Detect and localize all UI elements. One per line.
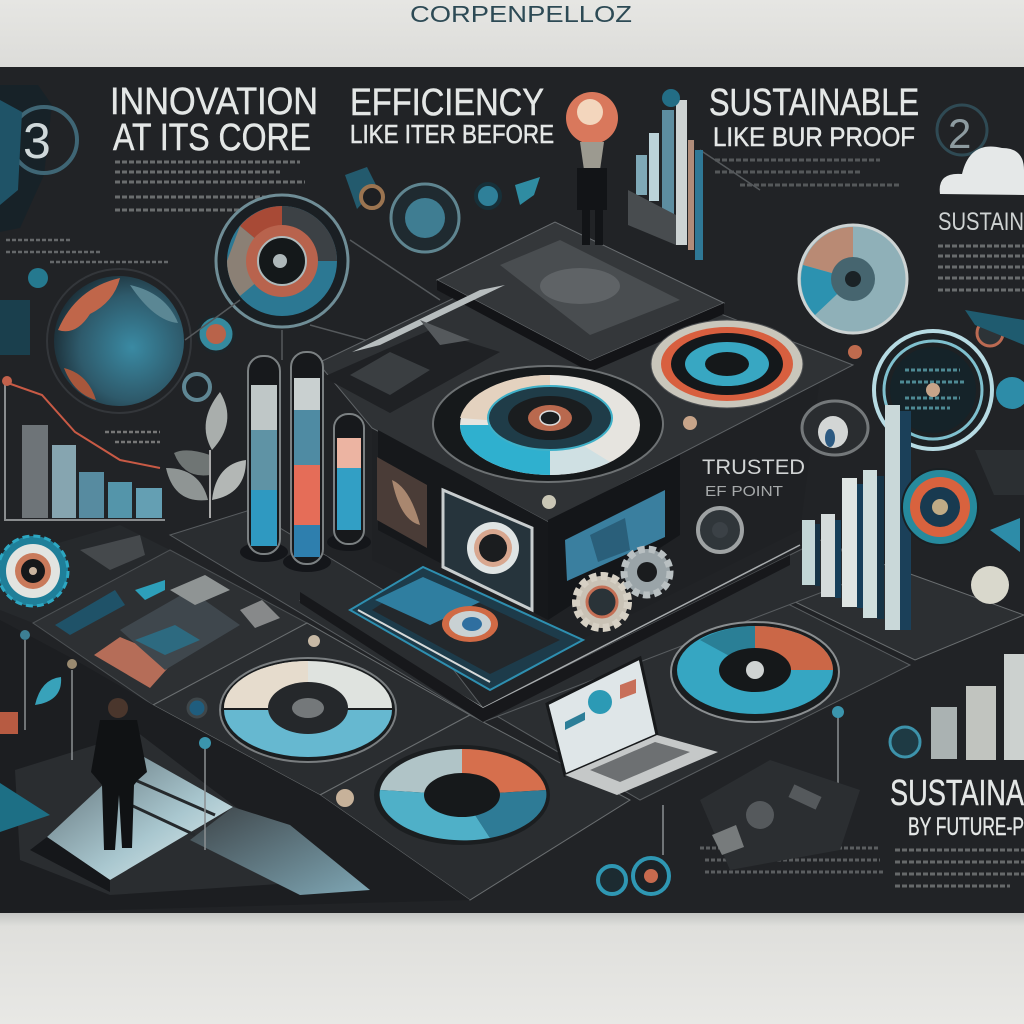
- text block: bottom center caption: [700, 848, 885, 872]
- icon: small bell dial: [802, 401, 868, 455]
- heading: efficiency: EFFICIENCY: [350, 82, 544, 124]
- icon: number 2 and cloud: [937, 105, 1024, 195]
- icon: lightbulb person: [566, 92, 618, 245]
- text block: sustainable caption top right: [715, 160, 900, 185]
- heading: innovation: [110, 81, 318, 159]
- chart: gauge left edge: [0, 536, 68, 606]
- icon: laptop: [547, 658, 718, 795]
- chart: right dial top: [799, 225, 907, 333]
- connector lines: [185, 150, 760, 360]
- heading: sustainable: SUSTAINABLE: [709, 82, 919, 124]
- panel: window left side of box: [443, 490, 532, 610]
- panel: box left side: [377, 430, 548, 620]
- text block: chart note: [105, 432, 160, 442]
- heading: innovation: AT ITS CORE: [113, 117, 311, 159]
- icon: leaf teal: [0, 630, 844, 749]
- chart: bars top middle: [628, 89, 703, 260]
- chart: upper right dial: [651, 320, 803, 408]
- label: trusted: EF POINT: [705, 483, 783, 500]
- icon: number 2 and cloud: 2: [948, 110, 971, 157]
- chart: bottom left dial: [220, 658, 396, 762]
- text block: sustain caption: [938, 246, 1024, 290]
- panel: left tile contents: [55, 535, 280, 688]
- wall background bottom: [0, 913, 1024, 1024]
- chart: right ring gauge: [874, 331, 1024, 449]
- chart: globe: [47, 269, 191, 413]
- platform lower tiles: [0, 525, 1024, 913]
- brand title: CORPENPELLOZ: [410, 1, 632, 27]
- chart: dial top left: [216, 195, 348, 327]
- heading: sustainable by future: [890, 772, 1024, 841]
- text block: small caption left: [6, 240, 170, 262]
- heading: sustainable: LIKE BUR PROOF: [713, 122, 915, 152]
- chart: test tubes: [240, 352, 371, 572]
- chart: line and bar chart left: [2, 376, 165, 520]
- panel: tablet: [350, 567, 583, 690]
- chart: orange eye dial: [902, 469, 1009, 604]
- main box base: [170, 378, 880, 722]
- text block: innovation caption: [115, 162, 305, 210]
- left markers: [25, 640, 838, 855]
- icons: bottom pair: [598, 858, 669, 894]
- label: trusted: TRUSTED: [702, 456, 805, 479]
- right misc icons: [683, 310, 1024, 552]
- icon: gears: [576, 508, 742, 628]
- panel: top plate: [437, 222, 724, 372]
- icon: small studs: [188, 635, 354, 807]
- small cluster icons top middle: [345, 167, 540, 252]
- label: trusted: [702, 456, 805, 500]
- icon: airplane on plate: [352, 285, 505, 352]
- bottom left platform with person: [0, 732, 370, 895]
- icon: number 3 badge: 3: [23, 113, 51, 169]
- heading: efficiency: [350, 82, 554, 149]
- wall background top: [0, 0, 1024, 67]
- icon: small target left: [0, 268, 234, 400]
- panel: box top surface: [318, 250, 853, 522]
- icon: box corner stud: [542, 495, 556, 509]
- chart: bottom right buildings: [890, 654, 1024, 760]
- chart: dial lower right: [671, 622, 839, 722]
- icon: debris cluster bottom: [700, 760, 860, 870]
- chart: bottom center dial: [374, 745, 550, 845]
- heading: sustainable: [709, 82, 919, 152]
- heading: efficiency: LIKE ITER BEFORE: [350, 119, 554, 149]
- icon: standing businessman: [91, 698, 147, 850]
- chart: main dial: [433, 366, 663, 482]
- heading: innovation: INNOVATION: [110, 81, 318, 123]
- chart: right bars: [802, 405, 911, 630]
- icon: plant: [166, 392, 246, 518]
- text block: bottom right caption: [895, 850, 1024, 886]
- panel: box right side: [548, 455, 680, 620]
- icon: number 3 badge: [0, 85, 77, 232]
